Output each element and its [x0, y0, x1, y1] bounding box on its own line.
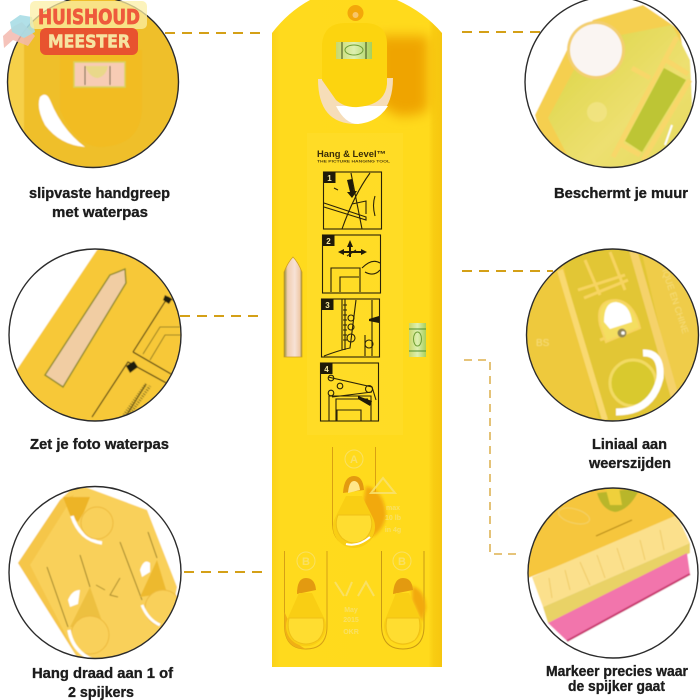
circle: underside with ruler and nail hook: BS — [536, 338, 550, 349]
hook B left with slot — [284, 551, 327, 649]
embossed markings: B — [398, 556, 406, 568]
connector: hook callout — [184, 571, 266, 573]
vertical bubble level — [409, 323, 426, 357]
lower left hook — [68, 590, 80, 607]
step 1 diagram: 1 — [327, 174, 332, 183]
caption: markeer precies: de spijker gaat — [568, 678, 665, 695]
tool body — [272, 0, 442, 667]
connector: handle callout — [165, 32, 266, 34]
thumb opening — [318, 78, 393, 124]
caption: liniaal aan weerszijden: weerszijden — [588, 455, 671, 472]
embossed markings: OKR — [343, 629, 359, 636]
caption: slipvaste handgreep: slipvaste handgreep — [29, 185, 170, 202]
caption: zet je foto waterpas: Zet je foto waterpas — [30, 436, 169, 453]
connector: wall protection callout — [462, 31, 541, 33]
sliding handle with level — [322, 23, 387, 107]
pencil slot — [284, 257, 302, 357]
circle: underside with ruler and nail hook — [526, 248, 700, 422]
heading: Hang & Level: Hang & Level™ — [317, 149, 386, 159]
connector: ruler callout — [462, 270, 553, 272]
handle shadow — [378, 36, 428, 116]
circle: handle with level — [0, 0, 185, 175]
step 4 diagram: 4 — [324, 365, 329, 374]
caption: beschermt je muur: Beschermt je muur — [554, 185, 688, 202]
connector: marking callout — [464, 360, 521, 554]
top hook — [63, 497, 90, 522]
logo: Huishoud Meester: MEESTER — [48, 32, 130, 52]
caption: slipvaste handgreep: met waterpas — [52, 204, 148, 221]
embossed markings: max — [386, 505, 400, 512]
step 2 diagram: 2 — [326, 237, 331, 246]
circle: back of tool with felt pad — [520, 0, 700, 175]
product: hang and level tool — [272, 0, 442, 667]
caption: liniaal aan weerszijden: Liniaal aan — [592, 436, 667, 453]
step 2 diagram — [322, 235, 380, 293]
step 4 diagram — [320, 363, 378, 421]
caption: hang draad: Hang draad aan 1 of — [32, 665, 174, 682]
circle: pencil slot close-up — [8, 248, 182, 422]
embossed markings: 2015 — [343, 617, 359, 624]
circle: marking edge close-up — [527, 487, 699, 659]
embossed markings — [297, 450, 411, 636]
step 3 diagram — [322, 299, 380, 357]
subheading: THE PICTURE HANGING TOOL — [317, 160, 391, 164]
hook B right with slot — [382, 551, 426, 649]
embossed markings: A — [350, 454, 358, 466]
circle: hooks close-up — [8, 486, 182, 660]
hanging hole — [348, 5, 364, 21]
step 3 diagram: 3 — [325, 301, 330, 310]
lower right hook — [140, 562, 150, 577]
circle: underside with ruler and nail hook: IQUE EN CHINE — [660, 268, 690, 335]
embossed markings: in 4g — [385, 527, 401, 534]
step 1 diagram — [324, 172, 382, 229]
embossed markings: May — [344, 607, 358, 614]
embossed markings: B — [302, 556, 310, 568]
logo: Huishoud Meester: HUISHOUD — [38, 5, 140, 29]
connector: pencil callout — [180, 315, 262, 317]
instruction panel — [307, 133, 403, 435]
hook A with slot — [332, 447, 386, 548]
embossed markings: 10 lb — [385, 515, 401, 522]
logo: Huishoud Meester — [3, 1, 147, 55]
caption: markeer precies: Markeer precies waar — [546, 663, 688, 680]
